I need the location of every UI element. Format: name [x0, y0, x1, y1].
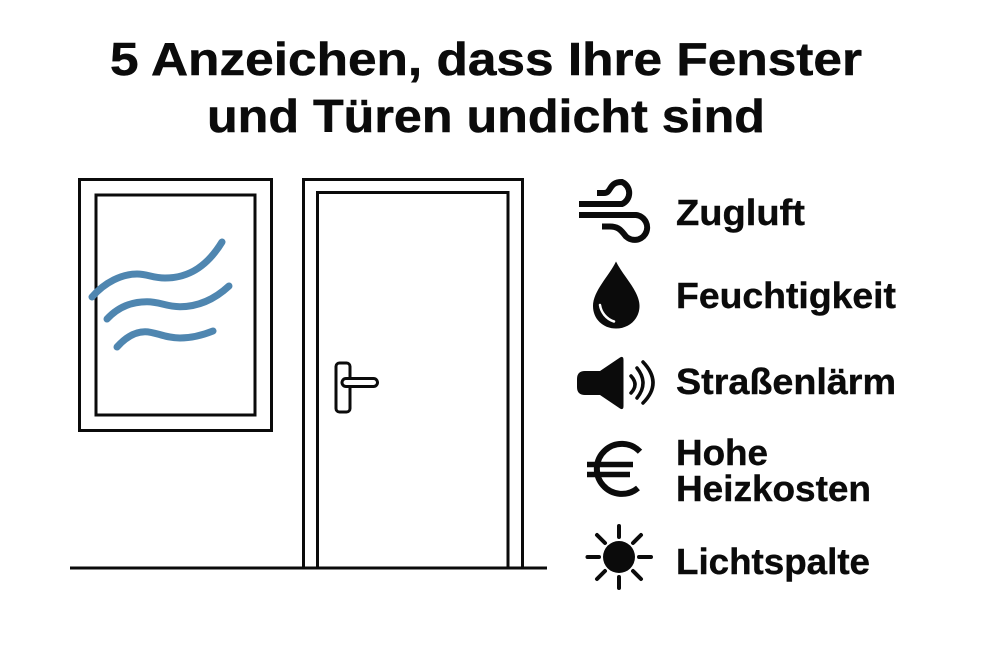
- item: Zugluft: [579, 182, 805, 240]
- item: Lichtspalte: [588, 526, 870, 588]
- icon: water drop: [593, 262, 640, 328]
- door handle: [336, 363, 378, 412]
- item: Feuchtigkeit: [593, 262, 896, 328]
- icon: wind: [579, 182, 647, 240]
- title: und Türen undicht sind: [207, 90, 765, 142]
- item: Straßenlärm: Straßenlärm: [676, 361, 896, 402]
- draught waves: [92, 242, 229, 347]
- item: Lichtspalte: Lichtspalte: [676, 541, 870, 582]
- item: Feuchtigkeit: Feuchtigkeit: [676, 275, 896, 316]
- item: Straßenlärm: [577, 357, 896, 409]
- item: Zugluft: Zugluft: [676, 192, 805, 233]
- item: Hohe Heizkosten: Hohe: [676, 432, 768, 473]
- icon: loudspeaker: [577, 357, 653, 409]
- floor line: [70, 566, 547, 570]
- title: 5 Anzeichen, dass Ihre Fenster: [110, 33, 862, 85]
- illustration: door: [304, 180, 522, 568]
- title: [110, 33, 862, 142]
- item: Hohe Heizkosten: [587, 432, 871, 509]
- icon: euro: [587, 444, 640, 494]
- item: Hohe Heizkosten: Heizkosten: [676, 468, 871, 509]
- icon: sun: [588, 526, 651, 588]
- illustration: window: [80, 180, 272, 430]
